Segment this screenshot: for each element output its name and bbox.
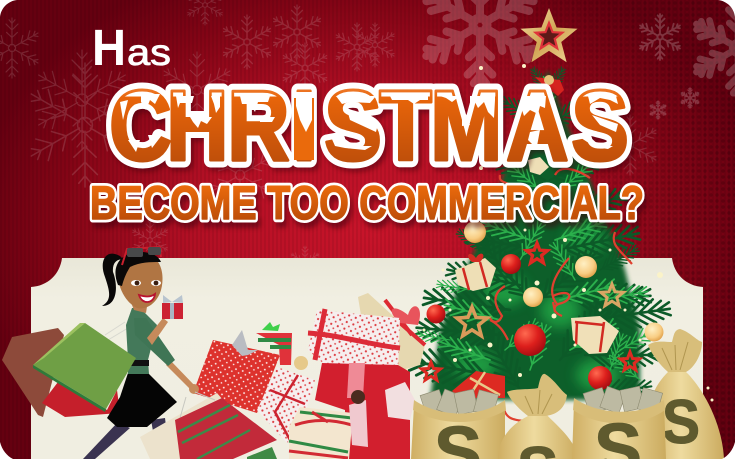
bag four: tied xyxy=(646,329,724,459)
heading: CHRISTMAS: CHRISTMAS xyxy=(109,69,629,181)
heading: CHRISTMAS: CHRISTMAS xyxy=(112,73,632,185)
cream gift xyxy=(528,157,549,175)
bag handles xyxy=(180,392,215,418)
gift: white striped side xyxy=(385,382,415,420)
gold ball xyxy=(523,287,543,307)
bag handles xyxy=(105,322,128,340)
red gift on tree xyxy=(452,371,505,398)
present held xyxy=(162,295,183,319)
top gift xyxy=(535,75,564,96)
arm with bag xyxy=(166,360,197,392)
heading: Has xyxy=(95,30,170,66)
heading: Has: H xyxy=(92,19,126,76)
snowflakes solid right xyxy=(420,0,735,119)
hair xyxy=(115,252,161,286)
big red ball xyxy=(514,324,546,356)
neck xyxy=(130,300,148,313)
bag four: tied: S xyxy=(662,388,700,457)
gold outline star xyxy=(457,307,487,336)
gift on tree xyxy=(571,316,619,354)
gift: ribbon and holly xyxy=(349,390,368,447)
bag: brown xyxy=(2,328,64,417)
bag: red xyxy=(42,382,120,417)
ponytail xyxy=(102,254,124,306)
snow drips xyxy=(120,92,618,152)
sparkles xyxy=(388,64,714,418)
green box corner xyxy=(247,447,277,459)
skirt xyxy=(107,373,177,427)
gift: white dotted box xyxy=(257,356,315,443)
red star xyxy=(421,362,441,380)
woman with shopping bags xyxy=(2,247,277,459)
gift: open cream box xyxy=(358,293,425,372)
belt xyxy=(128,360,149,366)
back leg xyxy=(83,422,130,459)
front leg xyxy=(151,418,170,459)
gold outline star xyxy=(601,284,623,306)
raised arm xyxy=(147,318,168,345)
money bags xyxy=(411,329,724,459)
gold ball xyxy=(644,322,664,342)
ribbons xyxy=(490,169,632,421)
bag three: open with money xyxy=(572,386,666,459)
gift: pink dotted box xyxy=(308,309,400,372)
bag: cream behind xyxy=(140,393,223,459)
red star xyxy=(620,352,640,370)
bag: red striped xyxy=(175,398,277,459)
cream panel with notched corners xyxy=(31,258,703,459)
heading: Has: as xyxy=(127,32,171,73)
green bag xyxy=(33,323,136,412)
christmas tree xyxy=(399,65,672,406)
letter I thickening xyxy=(294,98,314,160)
red ball xyxy=(588,366,612,390)
red ball xyxy=(501,254,521,274)
gift bow: silver xyxy=(232,330,258,356)
heading: CHRISTMAS: CHRISTMAS xyxy=(109,69,629,181)
bag two: tied xyxy=(498,374,578,459)
gift: large red box xyxy=(315,363,410,459)
bag one: open with money xyxy=(411,389,506,459)
sunglasses xyxy=(122,247,161,265)
tree top star xyxy=(520,8,578,62)
hand on bags xyxy=(189,384,199,394)
pile of gifts xyxy=(193,293,425,459)
gift: red dotted box xyxy=(193,340,280,413)
gold ball xyxy=(464,221,486,243)
gift: striped box xyxy=(289,407,353,459)
red star xyxy=(527,243,547,263)
red ball xyxy=(426,304,446,324)
eyes xyxy=(131,280,161,286)
torso xyxy=(126,308,157,374)
gift on tree xyxy=(455,254,496,291)
gift: green striped box xyxy=(256,322,292,365)
smile xyxy=(139,294,155,302)
gold ball xyxy=(575,256,597,278)
face xyxy=(118,256,163,308)
snowflakes backdrop xyxy=(0,0,659,278)
tree ornaments xyxy=(388,64,714,421)
